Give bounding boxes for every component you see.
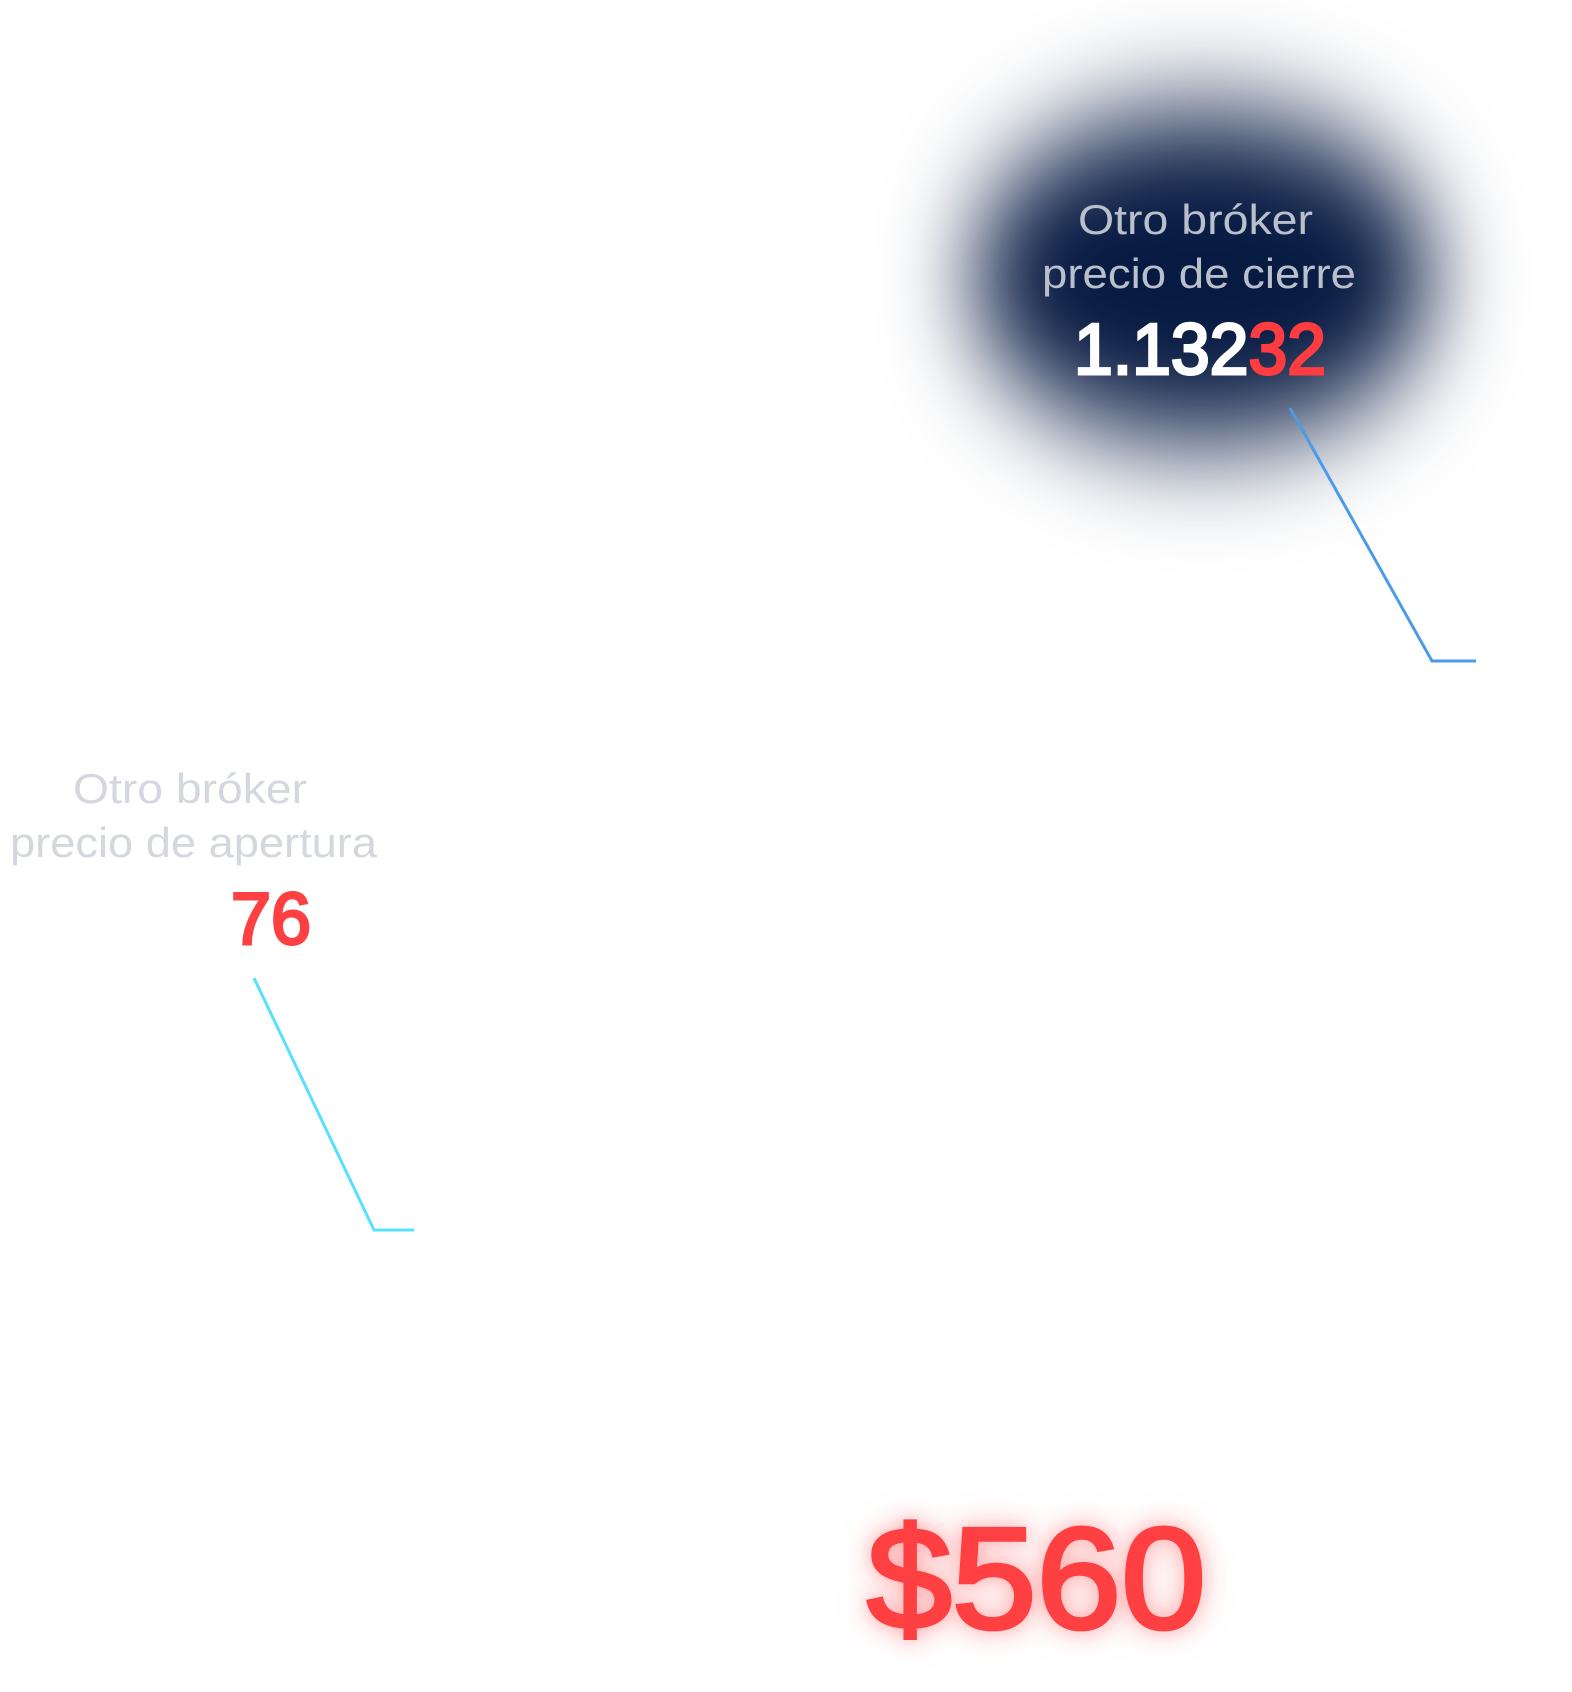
label: closing price: precio de cierre [1042, 250, 1356, 297]
label: closing price: Otro bróker [1078, 196, 1313, 243]
value: opening price digits 76: 76 [231, 879, 311, 960]
connector line: opening price [254, 978, 414, 1230]
label: opening price [10, 765, 378, 866]
value: closing price 1.13232: 1.13232 [1074, 310, 1326, 390]
label: opening price: precio de apertura [10, 819, 378, 866]
label: closing price [1042, 196, 1356, 297]
callout: opening price, other broker [10, 765, 414, 1230]
dark blurred spotlight [971, 112, 1435, 442]
connector line: closing price [1290, 408, 1476, 661]
loss amount $560: $560 [867, 1498, 1206, 1659]
callout: closing price, other broker [971, 112, 1476, 661]
label: opening price: Otro bróker [73, 765, 307, 812]
